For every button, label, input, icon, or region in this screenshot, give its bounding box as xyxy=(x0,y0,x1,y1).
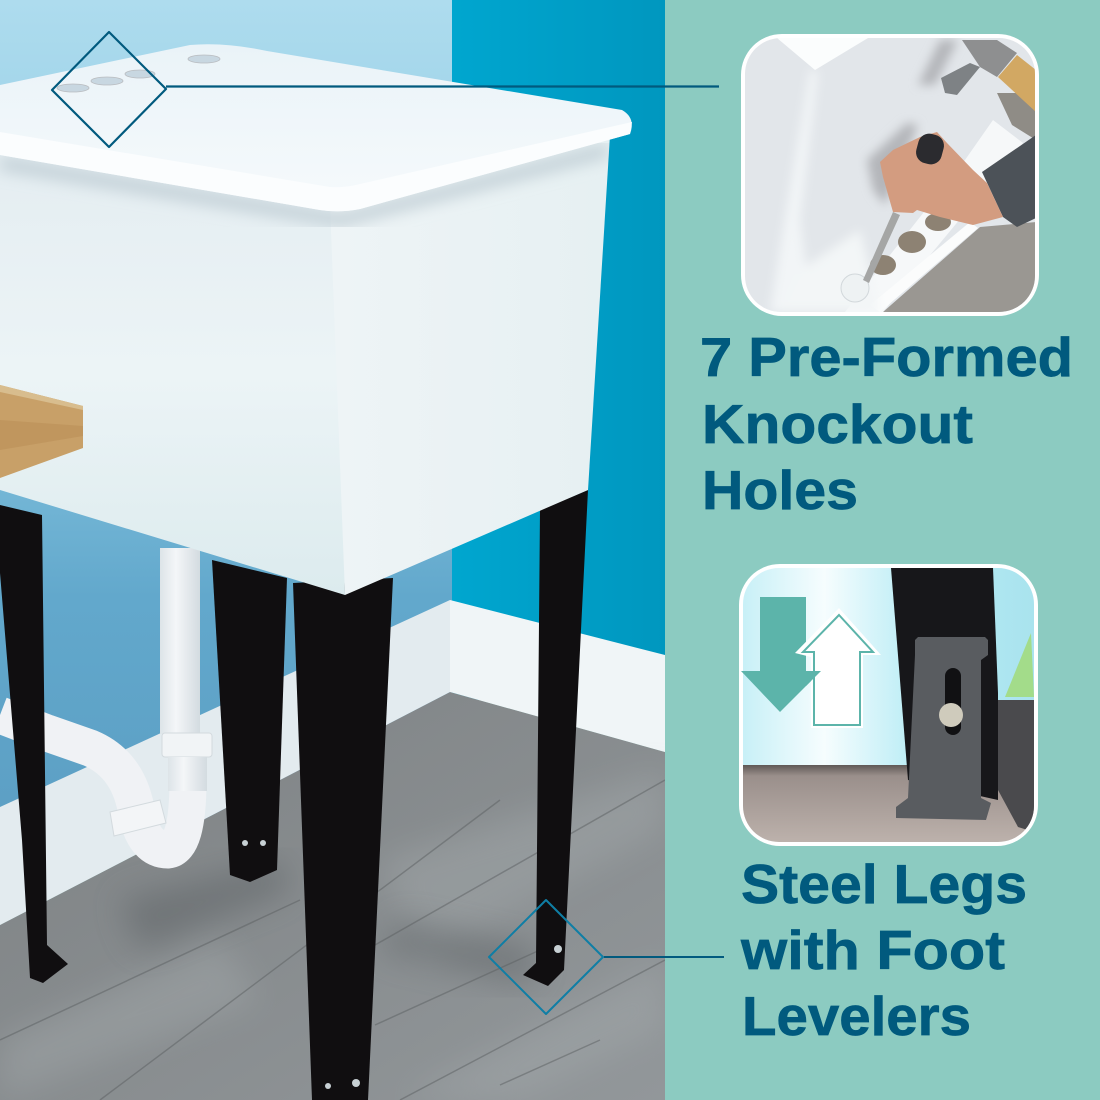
heading: steel legs: Steel Legs xyxy=(741,853,1027,915)
pipe collar xyxy=(162,733,212,757)
callout: bottom diamond and line xyxy=(489,900,724,1014)
trap nut xyxy=(110,800,166,836)
heading: knockout holes xyxy=(700,326,1073,521)
callout: top diamond and line xyxy=(52,32,719,147)
right teal panel xyxy=(665,0,1100,1100)
front centre leg xyxy=(293,578,393,1100)
heading: knockout holes: 7 Pre-Formed xyxy=(700,326,1073,388)
heading: steel legs xyxy=(740,853,1027,1047)
icon: arrow down xyxy=(741,597,821,712)
heading: steel legs: Levelers xyxy=(742,985,971,1047)
hand with punch xyxy=(863,212,900,283)
photo panel: foot leveler xyxy=(739,564,1038,846)
leg screws xyxy=(242,840,562,1089)
hammer xyxy=(998,55,1036,112)
photo: wall and floor scene xyxy=(0,0,665,1100)
leveler bracket xyxy=(896,637,991,820)
floor behind sink xyxy=(883,222,1036,312)
sink rim with holes xyxy=(845,120,1023,312)
right leg xyxy=(523,490,588,986)
front left leg xyxy=(0,505,68,983)
faucet holes xyxy=(57,55,220,92)
vertical pipe xyxy=(160,548,200,734)
S-trap body xyxy=(0,715,188,850)
heading: knockout holes: Knockout xyxy=(702,393,973,455)
sink basin xyxy=(0,44,632,595)
icon: arrow up xyxy=(795,608,881,728)
heading: steel legs: with Foot xyxy=(740,919,1005,981)
drain pipe xyxy=(0,548,212,850)
shadows xyxy=(867,40,958,205)
wooden shelf xyxy=(0,385,83,478)
heading: knockout holes: Holes xyxy=(702,459,858,521)
steel leg xyxy=(891,568,998,800)
sink rim and top surface xyxy=(0,44,632,211)
back left leg xyxy=(212,560,287,882)
sink legs xyxy=(0,490,588,1100)
photo panel: knockout holes xyxy=(741,34,1039,316)
lower coupling xyxy=(168,757,207,791)
